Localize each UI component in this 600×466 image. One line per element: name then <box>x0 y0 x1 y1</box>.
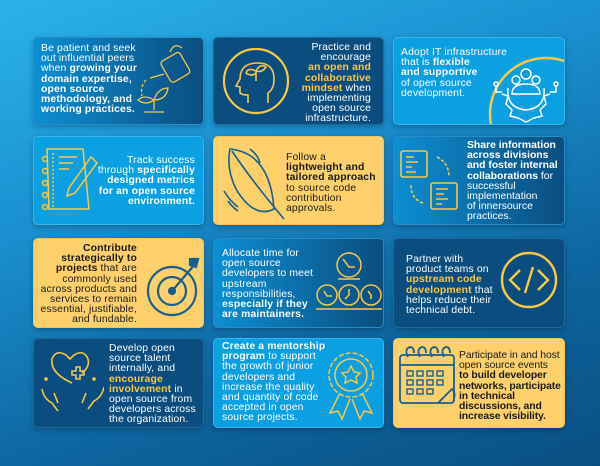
text block: technical debt. <box>406 305 475 316</box>
text block: Be patient and seek <box>41 43 136 54</box>
text block: Track success <box>127 155 195 166</box>
text block: Share information <box>467 140 556 151</box>
text block: upstream <box>222 279 267 290</box>
text block <box>98 155 195 207</box>
text block: and supportive <box>401 67 478 78</box>
text block: Partner with <box>406 254 463 265</box>
text block: designed metrics <box>107 175 195 186</box>
text block: working practices. <box>41 104 135 115</box>
text block: the growth of junior <box>222 361 313 372</box>
text block: when growing your <box>41 63 137 74</box>
text block: open source <box>222 258 281 269</box>
card 7: contribute strategically <box>33 238 204 328</box>
text block: Contribute <box>83 243 137 254</box>
text block: across divisions <box>467 150 548 161</box>
text block: environment. <box>128 196 195 207</box>
icon: calendar <box>399 346 456 404</box>
text block: through specifically <box>98 165 195 176</box>
text block: commonly used <box>62 274 137 285</box>
text block: collaborations for <box>467 171 553 182</box>
text block: Practice and <box>311 42 371 53</box>
text block <box>222 341 325 423</box>
text block: collaborative <box>305 73 371 84</box>
text block: strategically to <box>61 253 137 264</box>
text block: Develop open <box>109 343 175 354</box>
text block: services to remain <box>50 294 137 305</box>
text block <box>401 47 507 99</box>
text block: networks, participate <box>459 381 561 392</box>
text block: and quantity of code <box>222 392 319 403</box>
text block <box>302 42 371 124</box>
card 4: metrics <box>33 136 204 225</box>
text block: of innersource <box>467 201 533 212</box>
text block <box>459 350 561 422</box>
text block: and fundable. <box>72 314 137 325</box>
text block: in technical <box>459 391 515 402</box>
text block <box>109 343 196 425</box>
text block: accepted in open <box>222 402 304 413</box>
text block: projects that are <box>56 263 137 274</box>
text block: Allocate time for <box>222 248 299 259</box>
card 11: mentorship <box>213 338 384 428</box>
text block: helps reduce their <box>406 295 491 306</box>
text block: lightweight and <box>286 162 364 173</box>
text block: upstream code <box>406 274 482 285</box>
text block: for an open source <box>99 186 195 197</box>
text block: implementing <box>307 93 371 104</box>
text block: mindset when <box>302 83 371 94</box>
text block: Participate in and host <box>459 350 560 361</box>
card 6: share information <box>393 136 565 225</box>
text block: open source from <box>109 394 192 405</box>
text block: open source <box>41 84 104 95</box>
text block: to build developer <box>459 370 547 381</box>
text block: increase the quality <box>222 382 315 393</box>
text block: source projects. <box>222 412 298 423</box>
card 1: growing expertise <box>33 37 204 125</box>
text block: internally, and <box>109 363 175 374</box>
text block: especially if they <box>222 299 308 310</box>
text block: of open source <box>401 78 472 89</box>
icon: head with sprout <box>222 48 290 114</box>
text block: source talent <box>109 353 170 364</box>
icon: notebook with pencil <box>42 148 98 210</box>
text block: development that <box>406 285 493 296</box>
card 10: develop talent <box>33 338 204 428</box>
card 8: allocate time <box>213 238 384 328</box>
text block: encourage <box>109 374 163 385</box>
text block: contribution <box>286 193 342 204</box>
text block: encourage <box>321 52 371 63</box>
text block: and foster internal <box>467 160 558 171</box>
text block: successful <box>467 181 516 192</box>
text block: to source code <box>286 183 356 194</box>
icon: clocks <box>316 252 382 310</box>
text block <box>467 140 558 222</box>
text block: responsibilities, <box>222 289 296 300</box>
text block: tailored approach <box>286 172 376 183</box>
text block: program to support <box>222 351 316 362</box>
text block: Create a mentorship <box>222 341 325 352</box>
text block: practices. <box>467 211 511 222</box>
text block: essential, justifiable, <box>41 304 137 315</box>
text block: an open and <box>308 62 371 73</box>
text block: Adopt IT infrastructure <box>401 47 507 58</box>
text block: product teams on <box>406 264 489 275</box>
text block <box>222 248 313 320</box>
icon: award badge <box>328 352 374 421</box>
text block: the organization. <box>109 414 188 425</box>
card 2: open mindset <box>213 37 384 125</box>
text block: domain expertise, <box>41 74 132 85</box>
text block: across products and <box>41 284 137 295</box>
text block: developers to meet <box>222 268 313 279</box>
text block: involvement in <box>109 384 183 395</box>
card 12: events <box>393 338 565 428</box>
icon: watering can <box>137 45 190 113</box>
icon: gear with people <box>488 56 564 124</box>
text block: infrastructure. <box>305 113 371 124</box>
text block <box>406 254 493 316</box>
text block: that is flexible <box>401 57 470 68</box>
text block: increase visibility. <box>459 411 546 422</box>
icon: heart in hands <box>41 352 104 412</box>
card 5: lightweight approach <box>213 136 384 225</box>
icon: target <box>146 258 200 316</box>
text block <box>40 243 137 325</box>
icon: feather <box>223 148 284 220</box>
text block: open source <box>312 103 371 114</box>
text block: developers and <box>222 372 295 383</box>
icon: documents exchange <box>400 150 458 210</box>
text block: open source events <box>459 360 548 371</box>
text block <box>286 152 376 214</box>
text block: Follow a <box>286 152 326 163</box>
card 3: IT infrastructure <box>393 37 565 125</box>
text block: are maintainers. <box>222 309 304 320</box>
text block: implementation <box>467 191 537 202</box>
text block: development. <box>401 88 465 99</box>
text block: methodology, and <box>41 94 132 105</box>
text block <box>41 43 137 115</box>
text block: developers across <box>109 404 196 415</box>
icon: code brackets <box>500 252 558 308</box>
text block: approvals. <box>286 203 335 214</box>
text block: out influential peers <box>41 53 134 64</box>
card 9: upstream code <box>393 238 565 328</box>
text block: discussions, and <box>459 401 542 412</box>
